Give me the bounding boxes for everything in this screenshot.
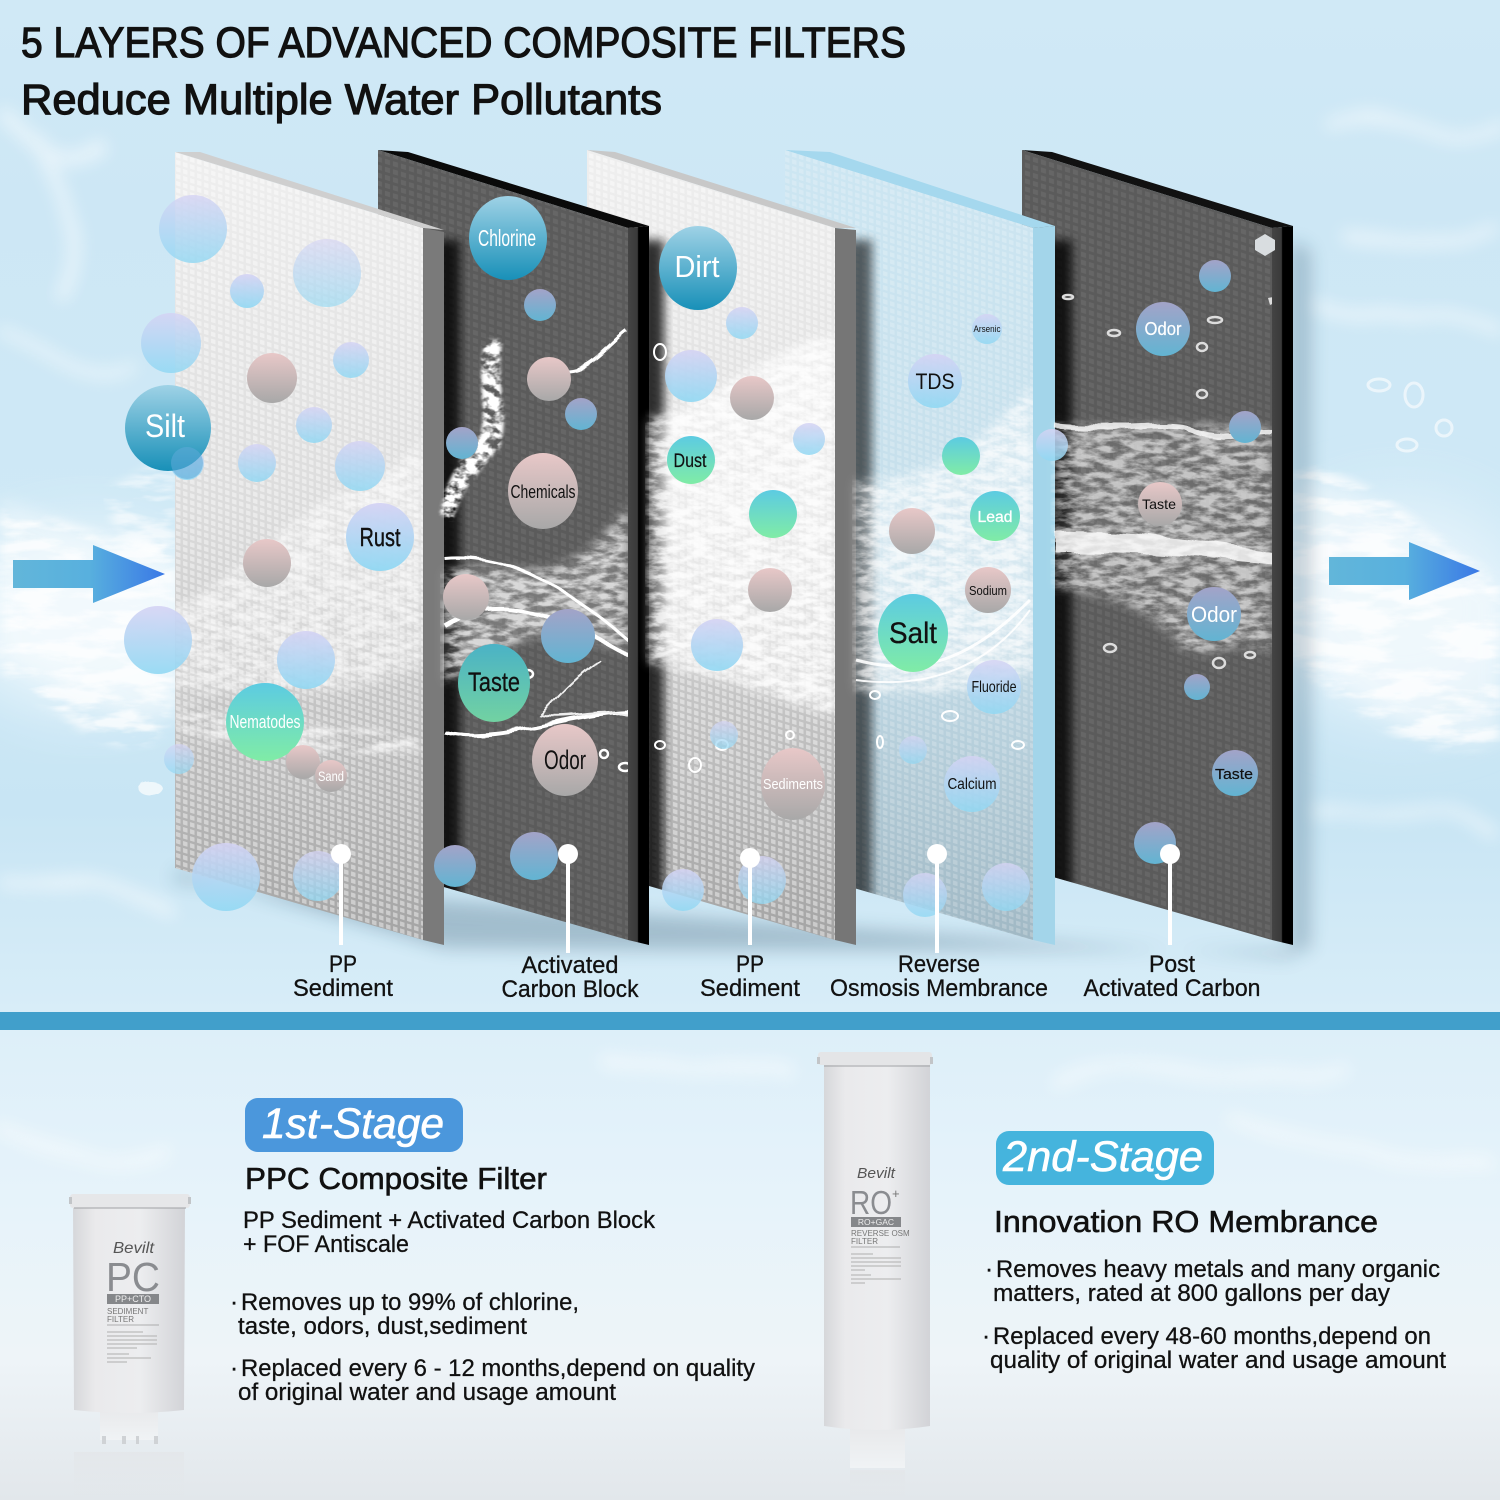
contaminant bubbles: PP sediment layer [124, 195, 414, 911]
bubble: Nematodes: Nematodes [230, 712, 300, 732]
text: first stage bullet two: · [230, 1355, 238, 1382]
water splash through the layers [175, 295, 1281, 772]
bubble: Odor: Odor [544, 745, 586, 775]
bubble: Odor upper: Odor [1144, 319, 1182, 339]
bubble: Odor [532, 724, 598, 796]
bubble: Chemicals: Chemicals [510, 482, 576, 502]
bubble: Arsenic: Arsenic [974, 324, 1001, 334]
layer label: Activated Carbon Block: Activated [522, 952, 618, 979]
product: PC filter cartridge: FILTER [107, 1315, 134, 1324]
contaminant bubbles: activated carbon layer [434, 196, 598, 887]
bubble: Dirt: Dirt [674, 249, 720, 284]
arrow: water out [1329, 542, 1480, 600]
background: water, upper section [0, 0, 1500, 1012]
contaminant bubbles: second PP sediment layer [659, 226, 825, 911]
text: second stage bullet two [982, 1323, 1446, 1374]
pointer: PP sediment second [740, 848, 760, 945]
text: first stage bullet two [230, 1355, 756, 1406]
bubble: Sodium: Sodium [969, 583, 1007, 598]
pointer: reverse osmosis [927, 844, 947, 953]
heading: PPC Composite Filter: PPC Composite Filter [245, 1161, 547, 1196]
bubble: Salt [878, 594, 948, 672]
product: RO filter cartridge: RO [850, 1184, 892, 1221]
title line 1: 5 LAYERS OF ADVANCED COMPOSITE FILTERS [21, 19, 906, 67]
text: first stage bullet two: Replaced every 6 - 12 months,depend on quality [241, 1355, 756, 1382]
bubble: Dust: Dust [674, 451, 707, 472]
bubble: TDS: TDS [916, 369, 954, 394]
bubble: Fluoride [967, 660, 1021, 714]
text: second stage bullet one: matters, rated at 800 gallons per day [993, 1280, 1391, 1307]
badge: 1st-Stage: 1st-Stage [262, 1100, 444, 1148]
text: second stage bullet two: quality of original water and usage amount [990, 1347, 1446, 1374]
bubble: Odor upper [1136, 302, 1190, 356]
pointer: post carbon [1160, 844, 1180, 945]
bubble: Calcium [944, 756, 1000, 812]
bubble: Taste lower [1212, 750, 1258, 796]
layer label: PP Sediment: Sediment [293, 975, 393, 1002]
bubble: Sediments: Sediments [763, 776, 823, 793]
arrow: water in [13, 545, 165, 603]
layer label: PP Sediment second [700, 951, 800, 1002]
text: second stage bullet two: Replaced every 48-60 months,depend on [993, 1323, 1431, 1350]
bubble: Taste middle: Taste [1142, 496, 1176, 512]
contaminant bubbles: RO membrane layer [878, 314, 1030, 917]
layer label: PP Sediment second: Sediment [700, 975, 800, 1002]
bubble: Taste lower: Taste [1215, 766, 1253, 783]
product: RO filter cartridge [817, 1052, 933, 1500]
title [21, 19, 906, 124]
text: first stage composition: PP Sediment + Activated Carbon Block [243, 1207, 656, 1234]
splash on layer 1 [175, 440, 423, 753]
layer label: PP Sediment: PP [329, 951, 357, 978]
bubble: Lead [970, 491, 1020, 541]
bubble: Taste: Taste [468, 667, 520, 697]
title line 2: Reduce Multiple Water Pollutants [21, 76, 662, 124]
text: first stage bullet one: taste, odors, dust,sediment [238, 1313, 527, 1340]
text: second stage bullet two: · [982, 1323, 990, 1350]
product: RO filter cartridge: RO+GAC [858, 1217, 894, 1227]
product: PC filter cartridge: SEDIMENT [107, 1307, 148, 1316]
splash on layer 4 [856, 385, 1033, 749]
heading: Innovation RO Membrance: Innovation RO Membrance [994, 1204, 1378, 1239]
product: RO filter cartridge: FILTER [851, 1237, 878, 1246]
section divider bar [0, 1012, 1500, 1030]
bubble: Sediments [761, 748, 825, 820]
splash on layer 5 [1055, 295, 1281, 668]
bubble: Odor lower [1187, 587, 1241, 641]
layer label: Activated Carbon Block: Carbon Block [502, 976, 639, 1003]
bubble: Taste middle [1138, 482, 1182, 526]
text: first stage bullet one: · [230, 1289, 238, 1316]
text: first stage composition [243, 1207, 656, 1258]
bubble: Dust [667, 436, 715, 484]
layer label: PP Sediment second: PP [736, 951, 764, 978]
bubble: Chlorine: Chlorine [478, 225, 536, 251]
layer label: PP Sediment [293, 951, 393, 1002]
panel: reverse osmosis membrane [785, 150, 1072, 950]
layer label: Post Activated Carbon: Activated Carbon [1084, 975, 1260, 1002]
bubble: Salt: Salt [889, 617, 938, 650]
text: first stage bullet one [230, 1289, 579, 1340]
bubble: Lead: Lead [978, 509, 1012, 526]
bubble: Nematodes [226, 683, 304, 761]
bubble: Odor lower: Odor [1191, 602, 1237, 627]
layer label: Reverse Osmosis Membrance: Osmosis Membrance [830, 975, 1048, 1002]
bubble: Silt [125, 385, 211, 471]
bubble: Fluoride: Fluoride [972, 679, 1017, 696]
layer label: Post Activated Carbon: Post [1149, 951, 1195, 978]
product: PC filter cartridge: PP+CTO [115, 1294, 151, 1304]
product: RO filter cartridge: Bevilt [857, 1165, 896, 1182]
text: second stage bullet one: · [985, 1256, 993, 1283]
panel: PP sediment second layer [587, 150, 872, 950]
panel: activated carbon block [378, 150, 664, 950]
water stream leaving, right of filters [1293, 379, 1500, 748]
panel: post activated carbon [1022, 150, 1293, 945]
bubble: Chlorine [469, 196, 547, 280]
pointer: activated carbon [558, 844, 578, 953]
bubble: Sand: Sand [318, 768, 344, 784]
bubble: Silt: Silt [145, 408, 185, 444]
product: PC filter cartridge: Bevilt [113, 1240, 155, 1257]
product: PC filter cartridge [69, 1194, 191, 1500]
product: RO filter cartridge: REVERSE OSM [851, 1229, 910, 1238]
panel: PP sediment first layer [175, 152, 460, 950]
layer label: Reverse Osmosis Membrance [830, 951, 1048, 1002]
text: first stage bullet two: of original water and usage amount [238, 1379, 616, 1406]
splash on layer 3 [649, 335, 835, 772]
water stream entering, left of filters [0, 440, 175, 795]
splash on layer 2 [440, 332, 631, 771]
text: first stage bullet one: Removes up to 99% of chlorine, [241, 1289, 579, 1316]
bubble: Chemicals [508, 453, 578, 529]
product: RO filter cartridge: + [892, 1186, 900, 1201]
layer label: Post Activated Carbon [1084, 951, 1260, 1002]
contaminant bubbles: post carbon layer [1036, 234, 1275, 864]
layer label: Activated Carbon Block [502, 952, 639, 1003]
badge: 2nd-Stage: 2nd-Stage [1002, 1133, 1203, 1181]
background: lower section [0, 1030, 1500, 1500]
bubble: Rust: Rust [360, 522, 401, 552]
text: second stage bullet one [985, 1256, 1440, 1307]
bubble: Taste [458, 644, 530, 722]
text: second stage bullet one: Removes heavy metals and many organic [996, 1256, 1440, 1283]
bubble: TDS [908, 354, 962, 408]
text: first stage composition: + FOF Antiscale [243, 1231, 409, 1258]
shadow cast by filter stack [175, 240, 1310, 958]
bubble: Sodium [965, 567, 1011, 613]
bubble: Sand [315, 760, 347, 792]
bubble: Calcium: Calcium [948, 776, 996, 793]
product: PC filter cartridge: PC [106, 1254, 160, 1300]
bubble: Arsenic [972, 314, 1002, 344]
bubble: Dirt [659, 226, 737, 310]
pointer: PP sediment [331, 844, 351, 945]
layer label: Reverse Osmosis Membrance: Reverse [898, 951, 980, 978]
bubble: Rust [346, 503, 414, 571]
